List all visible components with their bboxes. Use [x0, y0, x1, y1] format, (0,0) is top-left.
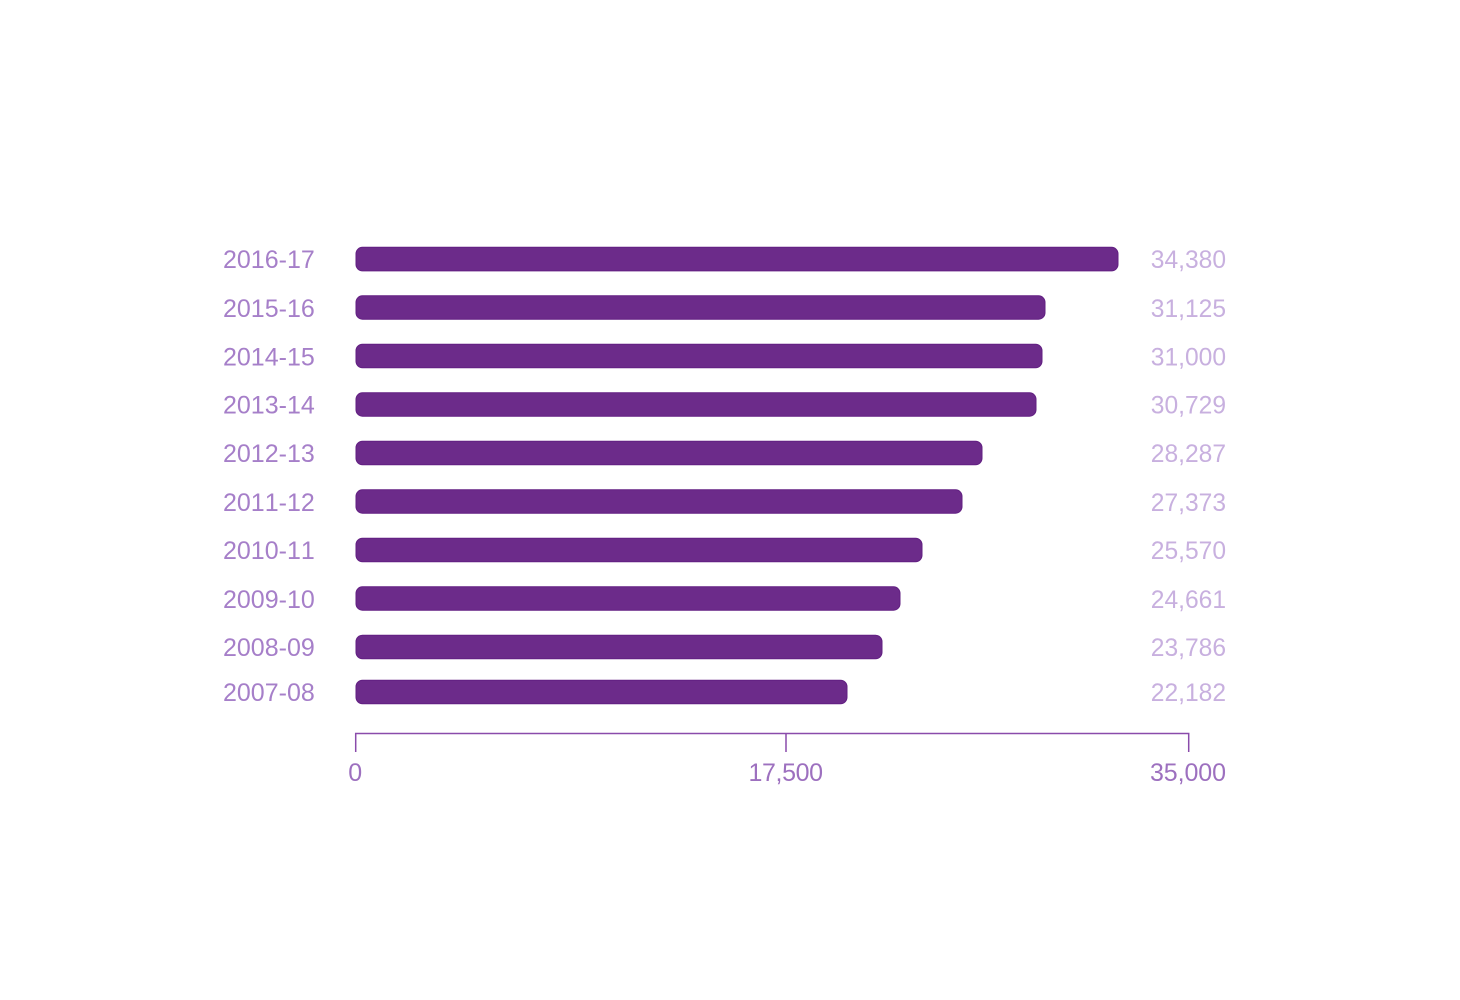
row: 2009-10: 24,661: [1151, 587, 1226, 614]
x axis: 35,000: [1150, 759, 1226, 787]
row: 2014-15: 31,000: [1151, 344, 1226, 371]
row: 2012-13: 28,287: [1151, 441, 1226, 468]
row: 2008-09: [223, 634, 1226, 662]
x axis: 0: [348, 759, 362, 787]
row: 2010-11: 25,570: [1151, 538, 1226, 565]
row: 2015-16: 2015-16: [223, 295, 315, 323]
row: 2014-15: 2014-15: [223, 343, 315, 371]
row: 2012-13: 2012-13: [223, 440, 315, 468]
row: 2010-11: [223, 537, 1226, 565]
x axis: [348, 734, 1226, 787]
row: 2013-14: 30,729: [1151, 393, 1226, 420]
row: 2007-08: 22,182: [1151, 680, 1226, 707]
row: 2010-11: 2010-11: [223, 537, 315, 565]
row: 2015-16: 31,125: [1151, 296, 1226, 323]
row: 2011-12: 27,373: [1151, 490, 1226, 517]
row: 2007-08: 2007-08: [223, 679, 315, 707]
x axis: 17,500: [748, 759, 823, 787]
row: 2012-13: [223, 440, 1226, 468]
row: 2007-08: [223, 679, 1226, 707]
row: 2008-09: 2008-09: [223, 634, 315, 662]
row: 2013-14: [223, 392, 1226, 420]
row: 2016-17: 34,380: [1151, 247, 1226, 274]
row: 2015-16: [223, 295, 1226, 323]
row: 2014-15: [223, 343, 1226, 371]
row: 2009-10: 2009-10: [223, 586, 315, 614]
row: 2016-17: [223, 246, 1226, 274]
row: 2008-09: 23,786: [1151, 635, 1226, 662]
row: 2011-12: [223, 489, 1226, 517]
row: 2013-14: 2013-14: [223, 392, 315, 420]
row: 2011-12: 2011-12: [223, 489, 315, 517]
row: 2016-17: 2016-17: [223, 246, 315, 274]
row: 2009-10: [223, 586, 1226, 614]
